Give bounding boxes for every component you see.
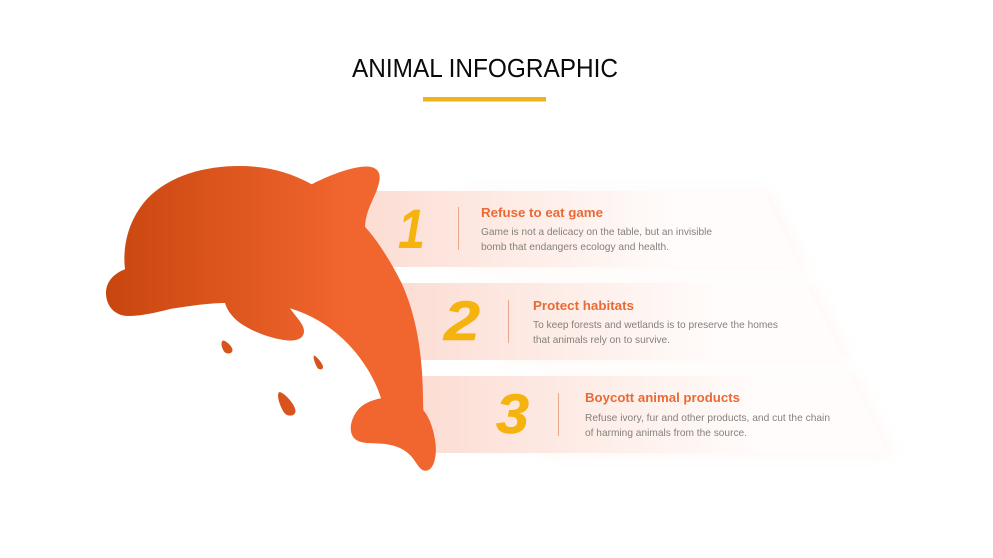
number 3: 3 [496,382,529,445]
text 1: Game is not a delicacy on the table, but an invisible [481,227,712,238]
title underline [423,97,546,102]
text 2 [533,320,778,346]
number 1: 1 [398,197,425,260]
text 1 [481,227,712,253]
text 3: of harming animals from the source. [585,428,747,439]
text 2: that animals rely on to survive. [533,335,670,346]
text 3: Refuse ivory, fur and other products, and cut the chain [585,413,830,424]
text 1: bomb that endangers ecology and health. [481,242,669,253]
panel: band 3 [410,376,894,455]
divider 2 [508,300,509,343]
number 2: 2 [443,289,480,352]
heading 3: Boycott animal products [585,390,740,405]
panel: band 1 [350,191,806,269]
text 2: To keep forests and wetlands is to preserve the homes [533,320,778,331]
divider 3 [558,393,559,436]
text 3 [585,413,830,439]
title: ANIMAL INFOGRAPHIC [352,55,618,83]
heading 1: Refuse to eat game [481,205,603,220]
icon: water drops [221,340,323,416]
panel: band 2 [385,283,851,362]
icon: dolphin [106,166,436,471]
heading 2: Protect habitats [533,298,634,313]
divider 1 [458,207,459,250]
